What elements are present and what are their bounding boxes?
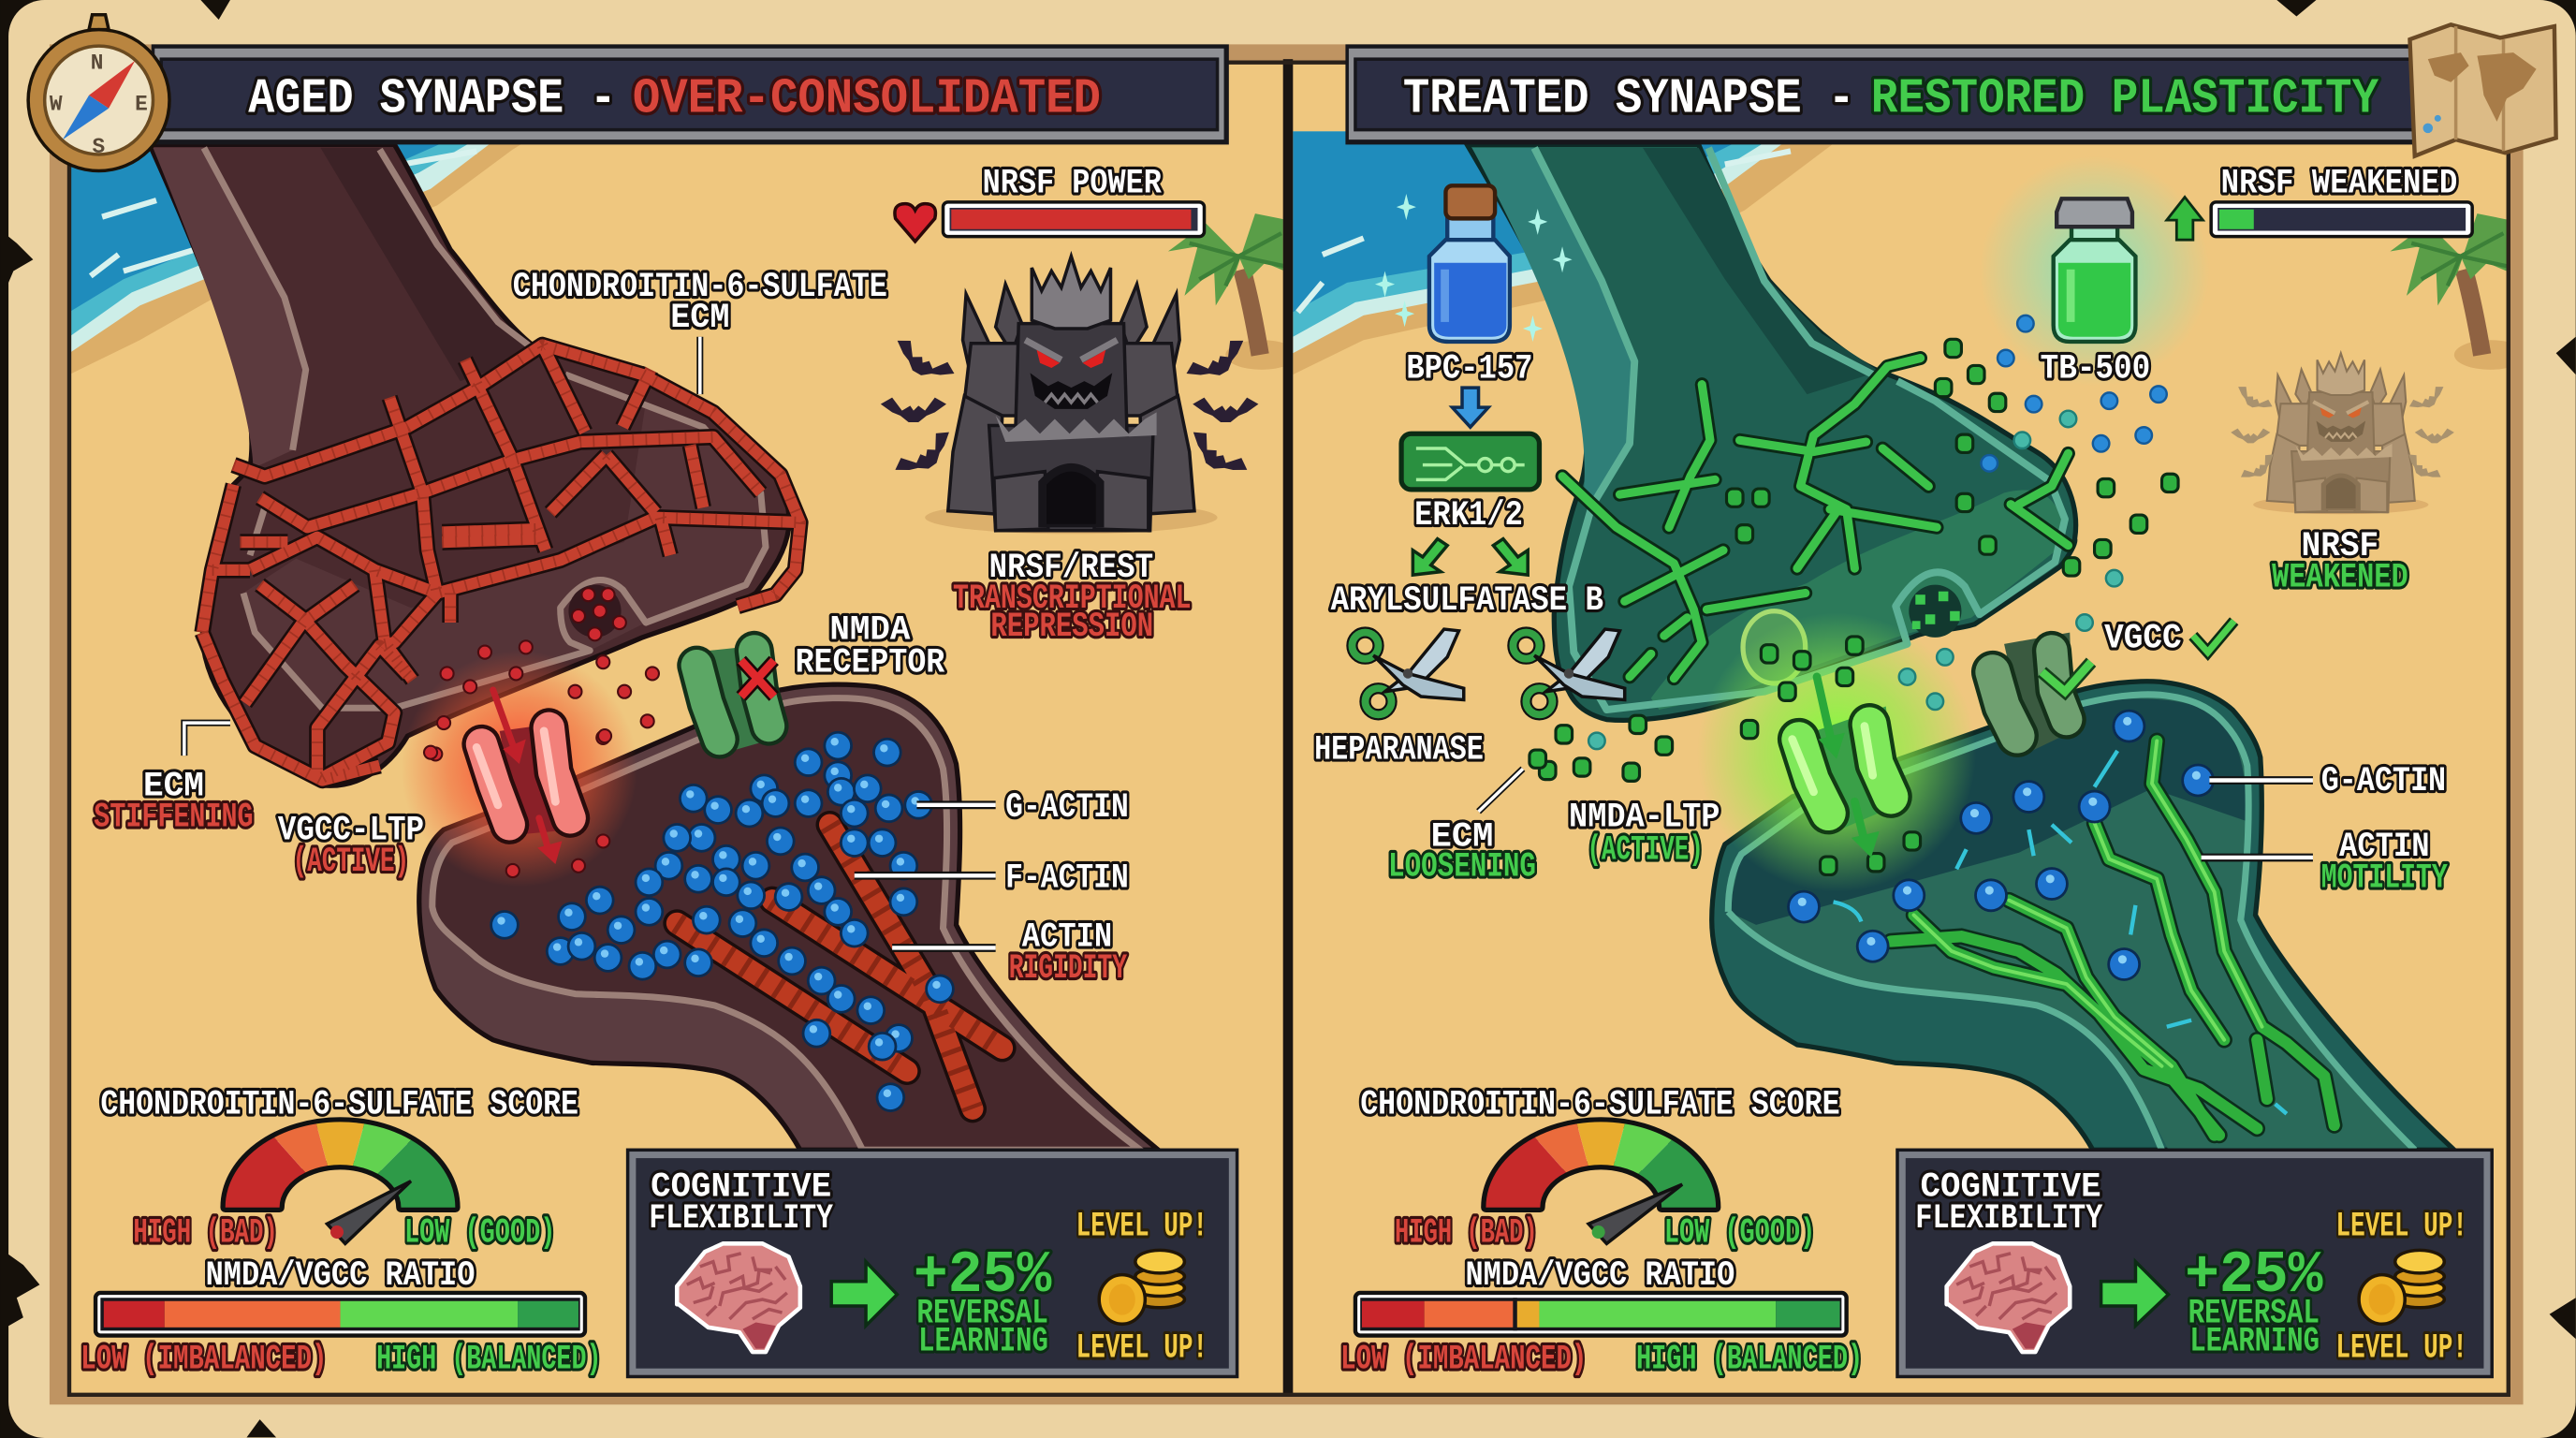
beach water xyxy=(1293,131,1848,374)
icon: coins xyxy=(2359,1250,2444,1324)
arrow xyxy=(831,1262,897,1326)
icon: red x xyxy=(741,660,774,697)
arrow: BPC to ERK xyxy=(1452,388,1488,427)
label: arylsulfatase B: ARYLSULFATASE B xyxy=(1331,581,1603,621)
score gauge: treated: CHONDROITIN-6-SULFATE SCORE xyxy=(1360,1086,1840,1125)
ratio bar: treated: NMDA/VGCC RATIO xyxy=(1466,1256,1734,1296)
label: NMDA-LTP active: (ACTIVE) xyxy=(1587,831,1704,871)
label: G-actin: G-ACTIN xyxy=(1005,788,1129,828)
vesicle pocket xyxy=(568,585,627,641)
label: VGCC-LTP active xyxy=(278,812,424,882)
label: VGCC-LTP active: (ACTIVE) xyxy=(293,843,409,882)
ERK1/2 module xyxy=(1401,433,1539,490)
vesicle pocket xyxy=(1909,585,1961,638)
label: NMDA receptor: NMDA xyxy=(829,611,911,651)
score gauge: aged: LOW (GOOD) xyxy=(404,1214,555,1254)
score gauge: aged: HIGH (BAD) xyxy=(133,1214,278,1254)
panel: cognitive flexibility treated: LEVEL UP! xyxy=(2336,1328,2467,1368)
icon: check on VGCC xyxy=(2042,662,2091,692)
label: VGCC check xyxy=(2104,619,2234,658)
icon: brain xyxy=(677,1243,800,1352)
gauge needle xyxy=(1588,1184,1682,1243)
title text: AGED SYNAPSE - xyxy=(248,70,616,126)
title bar: treated synapse: RESTORED PLASTICITY xyxy=(1871,70,2379,126)
arrows: ERK to arylsulfatase xyxy=(1412,539,1528,575)
icon: compass: S xyxy=(93,135,105,159)
icon: scissors arylsulfatase xyxy=(1513,629,1625,714)
actin strands xyxy=(1891,741,2334,1136)
label: actin motility xyxy=(2202,828,2449,899)
ratio bar: treated xyxy=(1340,1256,1863,1380)
icon: compass xyxy=(26,15,171,172)
label: NRSF/REST: REPRESSION xyxy=(990,608,1153,647)
panel: cognitive flexibility aged: LEARNING xyxy=(918,1322,1048,1361)
icon: treasure map xyxy=(2409,24,2556,156)
label: NMDA receptor xyxy=(796,611,945,683)
label: NMDA-LTP active: NMDA-LTP xyxy=(1569,799,1720,838)
VGCC dark receptor xyxy=(1993,633,2073,753)
panel: cognitive flexibility treated: LEVEL UP! xyxy=(2336,1208,2467,1247)
teal potion glow xyxy=(1988,165,2200,376)
F-actin rods xyxy=(677,825,1003,1108)
NRSF power bar xyxy=(944,202,1205,237)
sand ground xyxy=(69,63,1283,1395)
title bar: aged synapse xyxy=(152,44,1229,144)
panel: cognitive flexibility aged: LEVEL UP! xyxy=(1076,1208,1208,1247)
icon: compass: W xyxy=(50,93,63,117)
green calcium glow xyxy=(1697,613,1976,892)
label: ERK1/2: ERK1/2 xyxy=(1414,496,1523,536)
palm tree xyxy=(2391,213,2507,370)
faded vesicle pocket xyxy=(1743,611,1806,683)
bats around fortress xyxy=(880,341,1258,470)
NRSF weakened bar xyxy=(2211,202,2472,237)
G-actin dots xyxy=(490,731,955,1112)
potion: BPC-157 xyxy=(1375,185,1573,342)
label: ECM loosening xyxy=(1388,769,1536,887)
icon: coins xyxy=(1099,1250,1184,1324)
label: sand fortress: WEAKENED xyxy=(2272,558,2408,597)
label: ECM stiffening xyxy=(94,723,254,838)
label: TB-500: TB-500 xyxy=(2041,350,2150,389)
label: actin rigidity: ACTIN xyxy=(1022,918,1112,958)
faded bats around sand fortress xyxy=(2231,387,2454,477)
panel: cognitive flexibility treated: COGNITIVE xyxy=(1921,1167,2101,1207)
potion: TB-500 xyxy=(2054,198,2135,342)
label: sand fortress xyxy=(2272,527,2408,597)
icon: up arrow xyxy=(2167,198,2203,240)
panel: treated synapse xyxy=(1293,63,2526,1395)
title bar: treated synapse xyxy=(1345,44,2416,144)
gauge needle xyxy=(327,1181,411,1243)
title text: TREATED SYNAPSE - xyxy=(1403,70,1854,126)
VGCC receptor active xyxy=(476,690,572,864)
label: ECM stiffening: ECM xyxy=(143,767,204,806)
treated presynaptic terminal xyxy=(1467,144,2076,720)
calcium dots xyxy=(423,639,660,878)
label: NRSF/REST: NRSF/REST xyxy=(989,549,1153,588)
label: sand fortress: NRSF xyxy=(2302,527,2378,566)
panel: aged synapse xyxy=(69,63,1305,1395)
panel: cognitive flexibility aged: COGNITIVE xyxy=(651,1167,831,1207)
scattered fragments and peptide dots xyxy=(1530,315,2178,874)
label: NMDA receptor: RECEPTOR xyxy=(796,644,945,683)
panel: cognitive flexibility aged: +25% xyxy=(914,1241,1051,1309)
panel: cognitive flexibility treated: REVERSAL xyxy=(2188,1295,2320,1334)
icon: scissors heparanase xyxy=(1352,629,1464,714)
NRSF/REST dark fortress xyxy=(925,257,1218,534)
postsynaptic spine xyxy=(419,684,1158,1150)
label: ECM callout xyxy=(513,268,887,394)
label: ECM callout: CHONDROITIN-6-SULFATE xyxy=(513,268,887,307)
icon: compass: E xyxy=(135,93,148,117)
loosened ECM fragments xyxy=(1562,359,2068,679)
score gauge: aged: CHONDROITIN-6-SULFATE SCORE xyxy=(100,1086,578,1125)
ratio bar: aged: HIGH (BALANCED) xyxy=(376,1341,602,1380)
ECM net xyxy=(202,345,800,780)
score gauge: treated: LOW (GOOD) xyxy=(1664,1214,1815,1254)
label: ECM callout: ECM xyxy=(670,299,729,338)
label: NMDA-LTP active xyxy=(1569,799,1720,871)
postsynaptic spine xyxy=(1712,682,2454,1150)
panel: cognitive flexibility treated: FLEXIBILITY xyxy=(1915,1199,2103,1239)
presynaptic terminal xyxy=(150,144,789,785)
cyan motion arrows xyxy=(1834,751,2287,1114)
panel: cognitive flexibility treated: LEARNING xyxy=(2189,1322,2320,1361)
label: actin rigidity: RIGIDITY xyxy=(1009,949,1128,989)
red calcium glow xyxy=(401,651,637,888)
ratio bar: aged: NMDA/VGCC RATIO xyxy=(206,1256,475,1296)
ratio bar: aged: LOW (IMBALANCED) xyxy=(80,1341,327,1380)
label: NRSF power: NRSF POWER xyxy=(983,164,1163,203)
NMDA receptor active xyxy=(1793,677,1897,858)
label: ECM loosening: ECM xyxy=(1431,818,1493,858)
NMDA receptor blocked xyxy=(696,644,772,753)
label: VGCC-LTP active: VGCC-LTP xyxy=(278,812,424,851)
panel: cognitive flexibility aged: FLEXIBILITY xyxy=(649,1199,834,1239)
panel: cognitive flexibility treated xyxy=(1895,1149,2494,1378)
label: actin motility: ACTIN xyxy=(2339,828,2430,867)
label: NRSF weakened: NRSF WEAKENED xyxy=(2221,164,2457,203)
label: G-actin treated: G-ACTIN xyxy=(2321,762,2446,801)
label: BPC-157: BPC-157 xyxy=(1406,350,1532,389)
ratio bar: aged xyxy=(80,1256,602,1380)
score gauge: treated: HIGH (BAD) xyxy=(1395,1214,1538,1254)
label: ECM loosening: LOOSENING xyxy=(1388,847,1536,887)
label: VGCC check: VGCC xyxy=(2104,619,2182,658)
score gauge: treated xyxy=(1360,1086,1840,1254)
score gauge: aged xyxy=(100,1086,578,1254)
panel: cognitive flexibility treated: +25% xyxy=(2185,1241,2323,1309)
beach water xyxy=(71,144,520,374)
label: actin motility: MOTILITY xyxy=(2321,859,2449,899)
sand ground xyxy=(1293,63,2509,1395)
icon: heart xyxy=(895,204,935,242)
panel: cognitive flexibility aged xyxy=(626,1149,1238,1378)
ratio bar: treated: LOW (IMBALANCED) xyxy=(1340,1341,1587,1380)
label: heparanase: HEPARANASE xyxy=(1314,731,1484,770)
panel: cognitive flexibility aged: REVERSAL xyxy=(916,1295,1048,1334)
label: ECM stiffening: STIFFENING xyxy=(94,799,254,838)
center divider xyxy=(1283,59,1293,1397)
icon: compass: N xyxy=(91,51,103,76)
sand fortress weakened xyxy=(2253,353,2428,514)
label: F-actin: F-ACTIN xyxy=(1005,859,1129,899)
arrow xyxy=(2101,1262,2169,1326)
title bar: aged synapse: OVER-CONSOLIDATED xyxy=(633,70,1101,126)
palm tree xyxy=(1168,213,1283,370)
G-actin dots xyxy=(1787,710,2215,981)
panel: cognitive flexibility aged: LEVEL UP! xyxy=(1076,1328,1208,1368)
ratio bar: treated: HIGH (BALANCED) xyxy=(1636,1341,1863,1380)
label: actin rigidity xyxy=(892,918,1128,989)
label: NRSF/REST xyxy=(953,549,1191,647)
label: NRSF/REST: TRANSCRIPTIONAL xyxy=(953,580,1191,619)
icon: brain xyxy=(1947,1243,2070,1352)
